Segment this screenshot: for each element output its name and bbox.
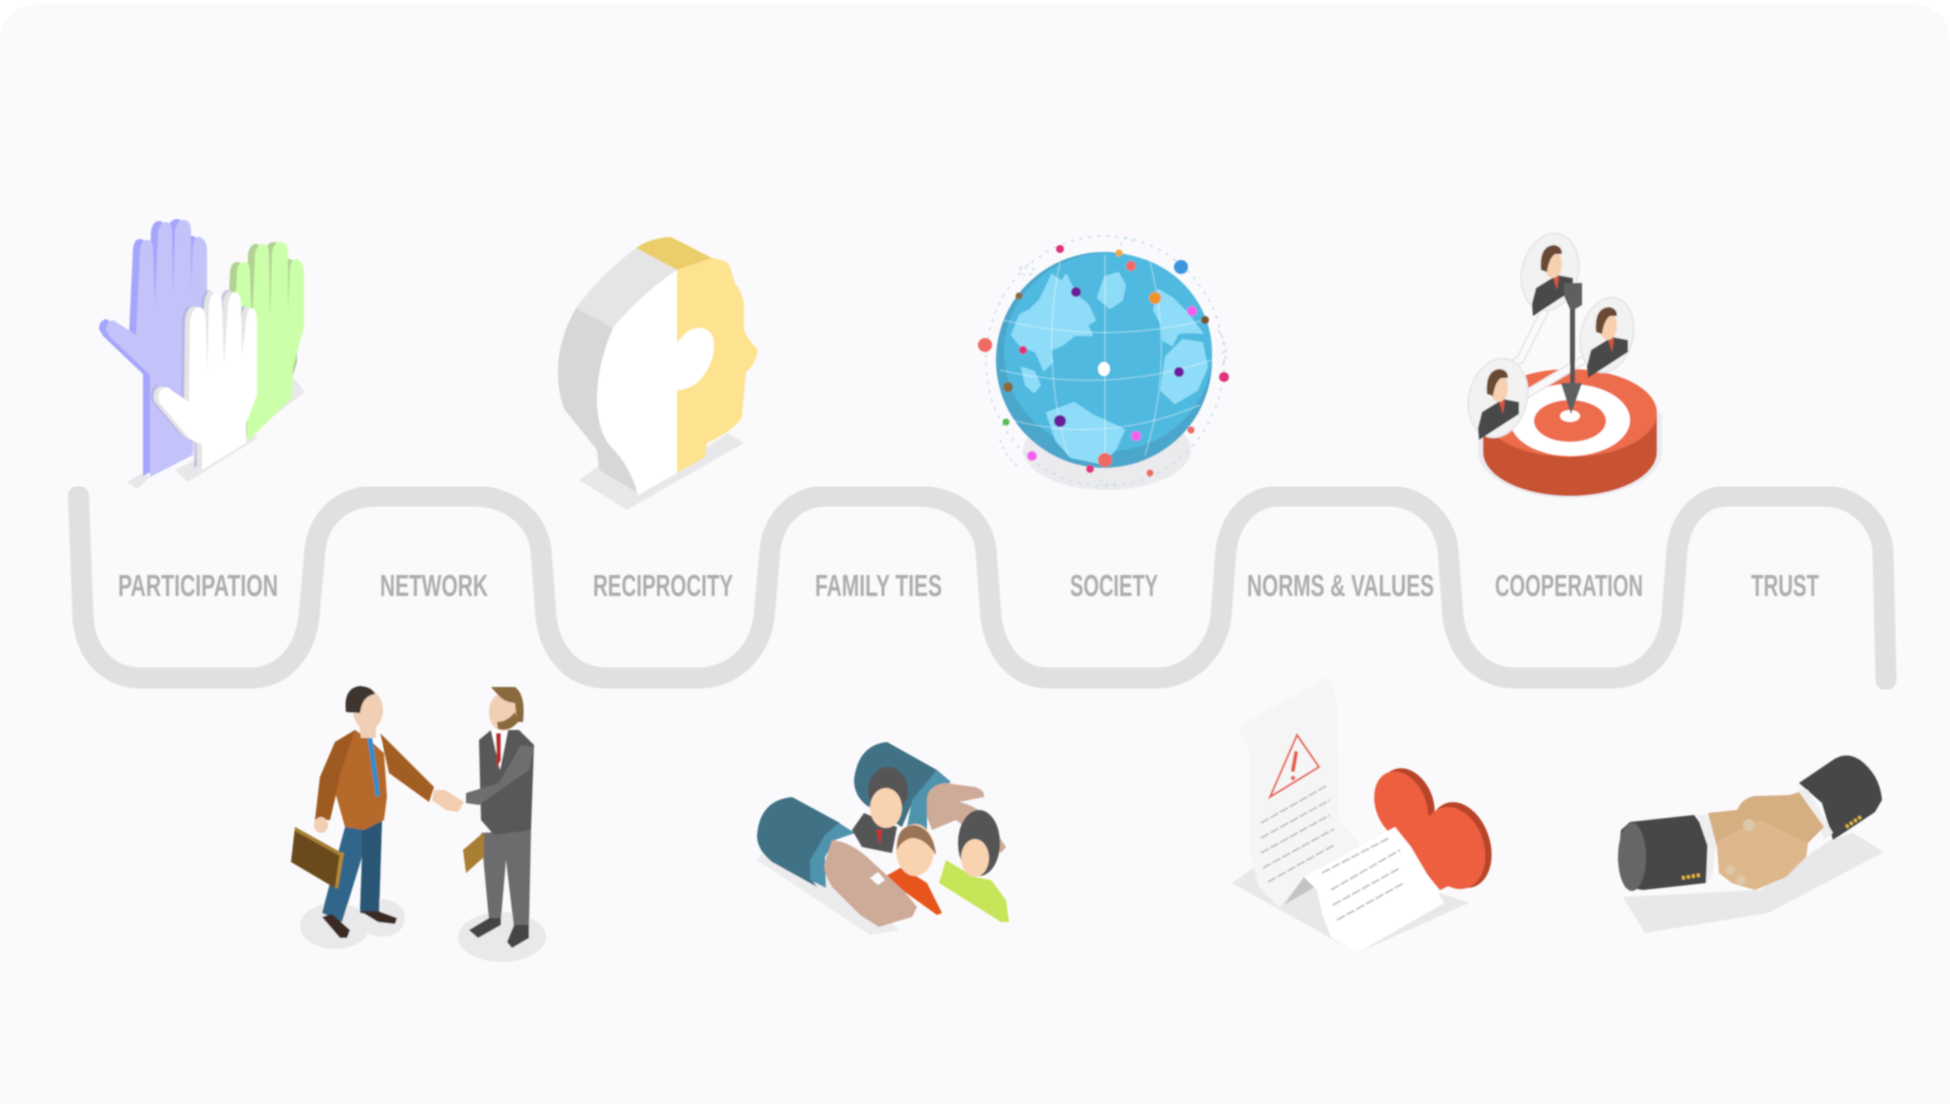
label: society: SOCIETY [1070,568,1158,603]
labels [118,568,1819,603]
label: trust: TRUST [1751,568,1819,603]
icon: family ties hands and people [757,742,1009,935]
icon: head with ear [558,237,758,510]
icon: norms document and heart [1232,677,1502,953]
label: cooperation: COOPERATION [1495,568,1643,603]
label: network: NETWORK [380,568,488,603]
label: norms and values: NORMS & VALUES [1247,568,1434,603]
icon: target with people and arrow [1460,227,1662,498]
label: family ties: FAMILY TIES [815,568,942,603]
label: reciprocity: RECIPROCITY [593,568,733,603]
icon: businessmen shaking hands [291,686,546,962]
icon: trust handshake [1618,755,1884,933]
winding path [78,496,1886,680]
icon: raised hands [99,219,305,499]
icon: globe with connected dots [978,236,1229,490]
label: participation: PARTICIPATION [118,568,278,603]
